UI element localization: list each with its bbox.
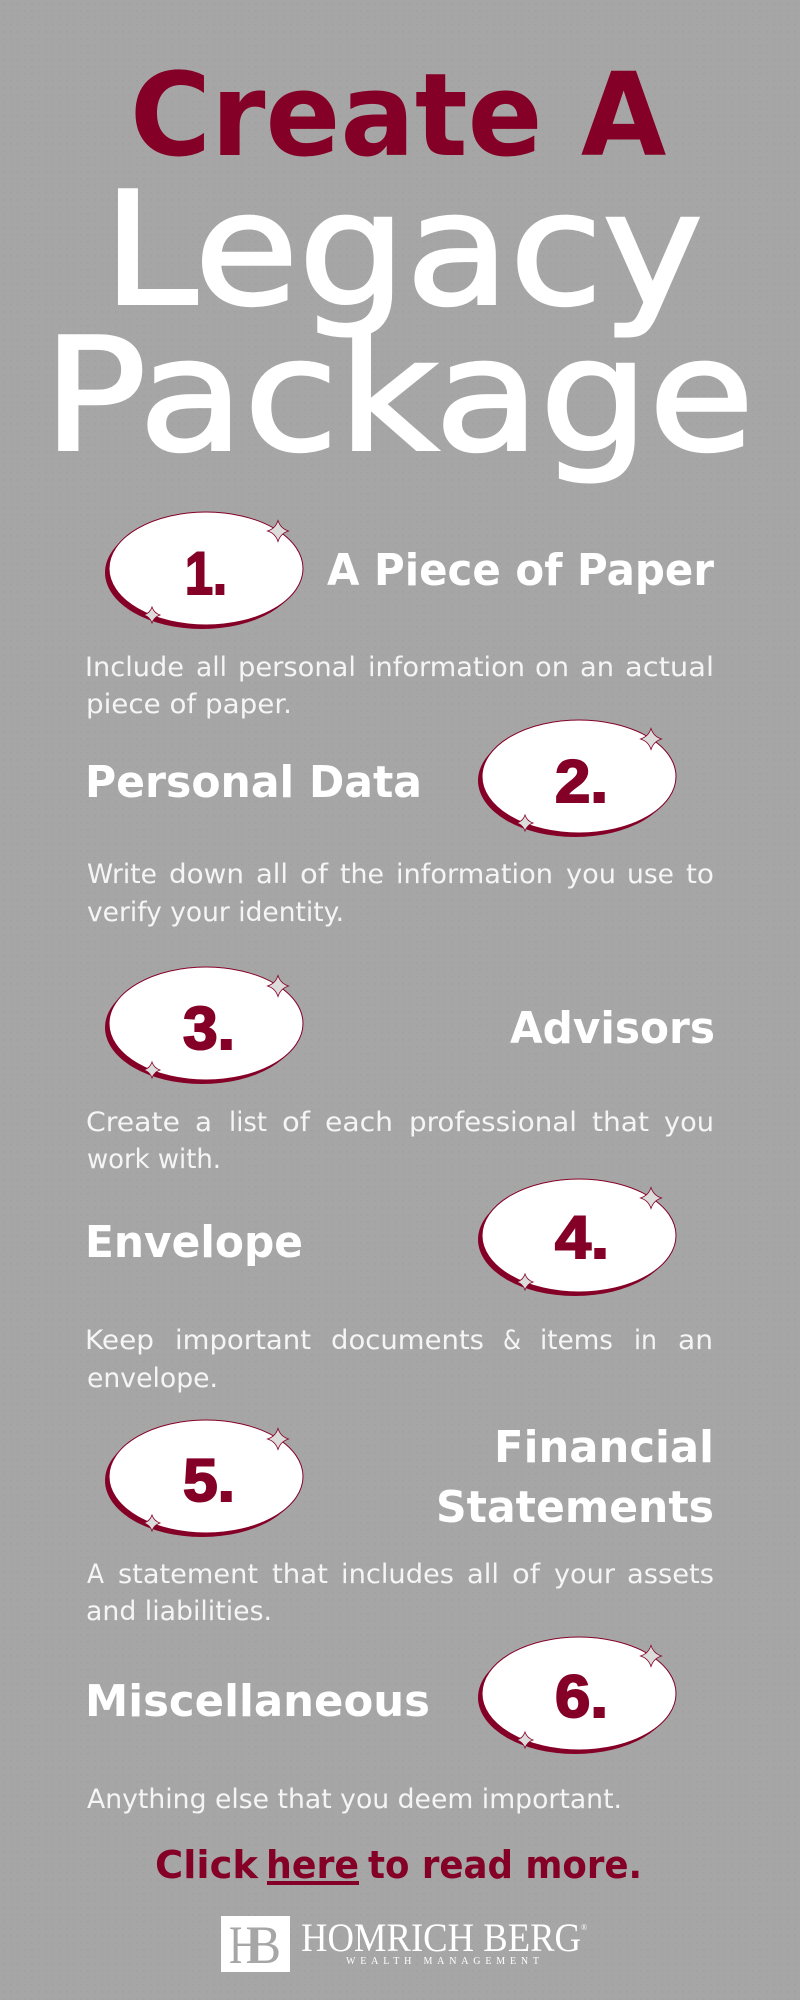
body text 1: information <box>368 652 525 683</box>
heading: Financial Statements <box>436 1422 714 1533</box>
body text 4: envelope. <box>87 1363 218 1394</box>
step 6 panel <box>85 1637 676 1815</box>
badge 1 <box>105 512 303 629</box>
body text 5: includes <box>341 1559 454 1590</box>
body text 3: you <box>664 1107 714 1138</box>
body text 4: Keep <box>85 1325 154 1356</box>
registered mark: ® <box>581 1923 587 1932</box>
heading: Envelope: Envelope <box>85 1217 303 1268</box>
body text 3: professional <box>409 1107 577 1138</box>
body text 4: important <box>175 1325 311 1356</box>
logo: Homrich Berg Wealth Management <box>221 1915 587 1975</box>
body text 2: use <box>627 859 674 890</box>
body text 5: that <box>272 1559 328 1590</box>
logo tagline: WEALTH MANAGEMENT <box>346 1956 539 1967</box>
body text 3: of <box>282 1107 312 1138</box>
body text 4: & <box>503 1325 521 1356</box>
logo wordmark: HOMRICH BERG <box>301 1915 581 1960</box>
body text 1: piece of paper. <box>86 689 292 720</box>
body text 3: work with. <box>87 1144 221 1175</box>
badge 4 <box>478 1179 676 1296</box>
body text 1 <box>85 652 714 720</box>
heading: Advisors: Advisors <box>510 1003 715 1054</box>
body text 4: items <box>540 1325 613 1356</box>
body text 4: an <box>678 1325 713 1356</box>
badge 6 <box>478 1637 676 1754</box>
title line: Create A: Create A <box>130 48 666 183</box>
logo mark <box>221 1915 290 1975</box>
step 5 panel <box>86 1420 714 1627</box>
title line: Package: Package <box>43 305 754 487</box>
call to action: Click <box>155 1843 259 1887</box>
badge 2 <box>478 720 676 837</box>
body text 5: your <box>554 1559 616 1590</box>
body text 2: verify your identity. <box>87 897 344 928</box>
badge 6: 6. <box>555 1663 608 1730</box>
call to action: to read more. <box>368 1843 642 1887</box>
body text 3: a <box>195 1107 212 1138</box>
body text 3: list <box>229 1107 267 1138</box>
body text 2 <box>87 859 714 928</box>
badge 5: 5. <box>183 1447 235 1514</box>
title line: Legacy: Legacy <box>103 160 703 341</box>
body text 1: on <box>535 652 569 683</box>
heading: A Piece of Paper: A Piece of Paper <box>327 545 714 596</box>
title <box>43 48 754 487</box>
body text 1: an <box>580 652 614 683</box>
body text 2: all <box>256 859 288 890</box>
body text 1: actual <box>625 652 714 683</box>
body text 5: assets <box>627 1559 714 1590</box>
body text 2: of <box>300 859 330 890</box>
body text 1: all <box>196 652 227 683</box>
body text 4 <box>85 1325 713 1394</box>
body text 6: Anything else that you deem important. <box>87 1784 622 1815</box>
heading: Financial Statements: Financial <box>494 1422 714 1473</box>
body text 3 <box>86 1107 714 1175</box>
badge 1: 1. <box>185 540 227 607</box>
logo mark: H <box>229 1915 259 1975</box>
body text 3: that <box>592 1107 649 1138</box>
body text 2: the <box>340 859 384 890</box>
body text 4: documents <box>331 1325 484 1356</box>
badge 5 <box>105 1420 303 1537</box>
body text 2: down <box>169 859 244 890</box>
body text 3: Create <box>86 1107 180 1138</box>
badge 3 <box>105 967 303 1084</box>
heading: Miscellaneous: Miscellaneous <box>85 1676 430 1727</box>
body text 1: personal <box>238 652 356 683</box>
body text 2: to <box>686 859 714 890</box>
body text 5: statement <box>118 1559 258 1590</box>
step 3 panel <box>86 967 715 1175</box>
body text 2: information <box>396 859 553 890</box>
call to action: here <box>266 1843 359 1887</box>
body text 3: each <box>325 1107 393 1138</box>
body text 5: of <box>512 1559 542 1590</box>
logo mark: B <box>248 1915 281 1975</box>
body text 1: Include <box>85 652 184 683</box>
body text 5: A <box>87 1559 104 1590</box>
step 4 panel <box>85 1179 713 1394</box>
step 2 panel <box>85 720 714 928</box>
body text 4: in <box>634 1325 657 1356</box>
body text 2: Write <box>87 859 157 890</box>
step 1 panel <box>85 512 714 720</box>
body text 5: and liabilities. <box>86 1596 272 1627</box>
badge 3: 3. <box>183 995 235 1062</box>
body text 2: you <box>566 859 616 890</box>
heading: Financial Statements: Statements <box>436 1482 714 1533</box>
heading: Personal Data: Personal Data <box>85 757 422 808</box>
badge 4: 4. <box>555 1204 609 1271</box>
body text 5 <box>86 1559 714 1627</box>
body text 5: all <box>467 1559 499 1590</box>
badge 2: 2. <box>555 748 608 815</box>
call to action <box>155 1843 642 1887</box>
